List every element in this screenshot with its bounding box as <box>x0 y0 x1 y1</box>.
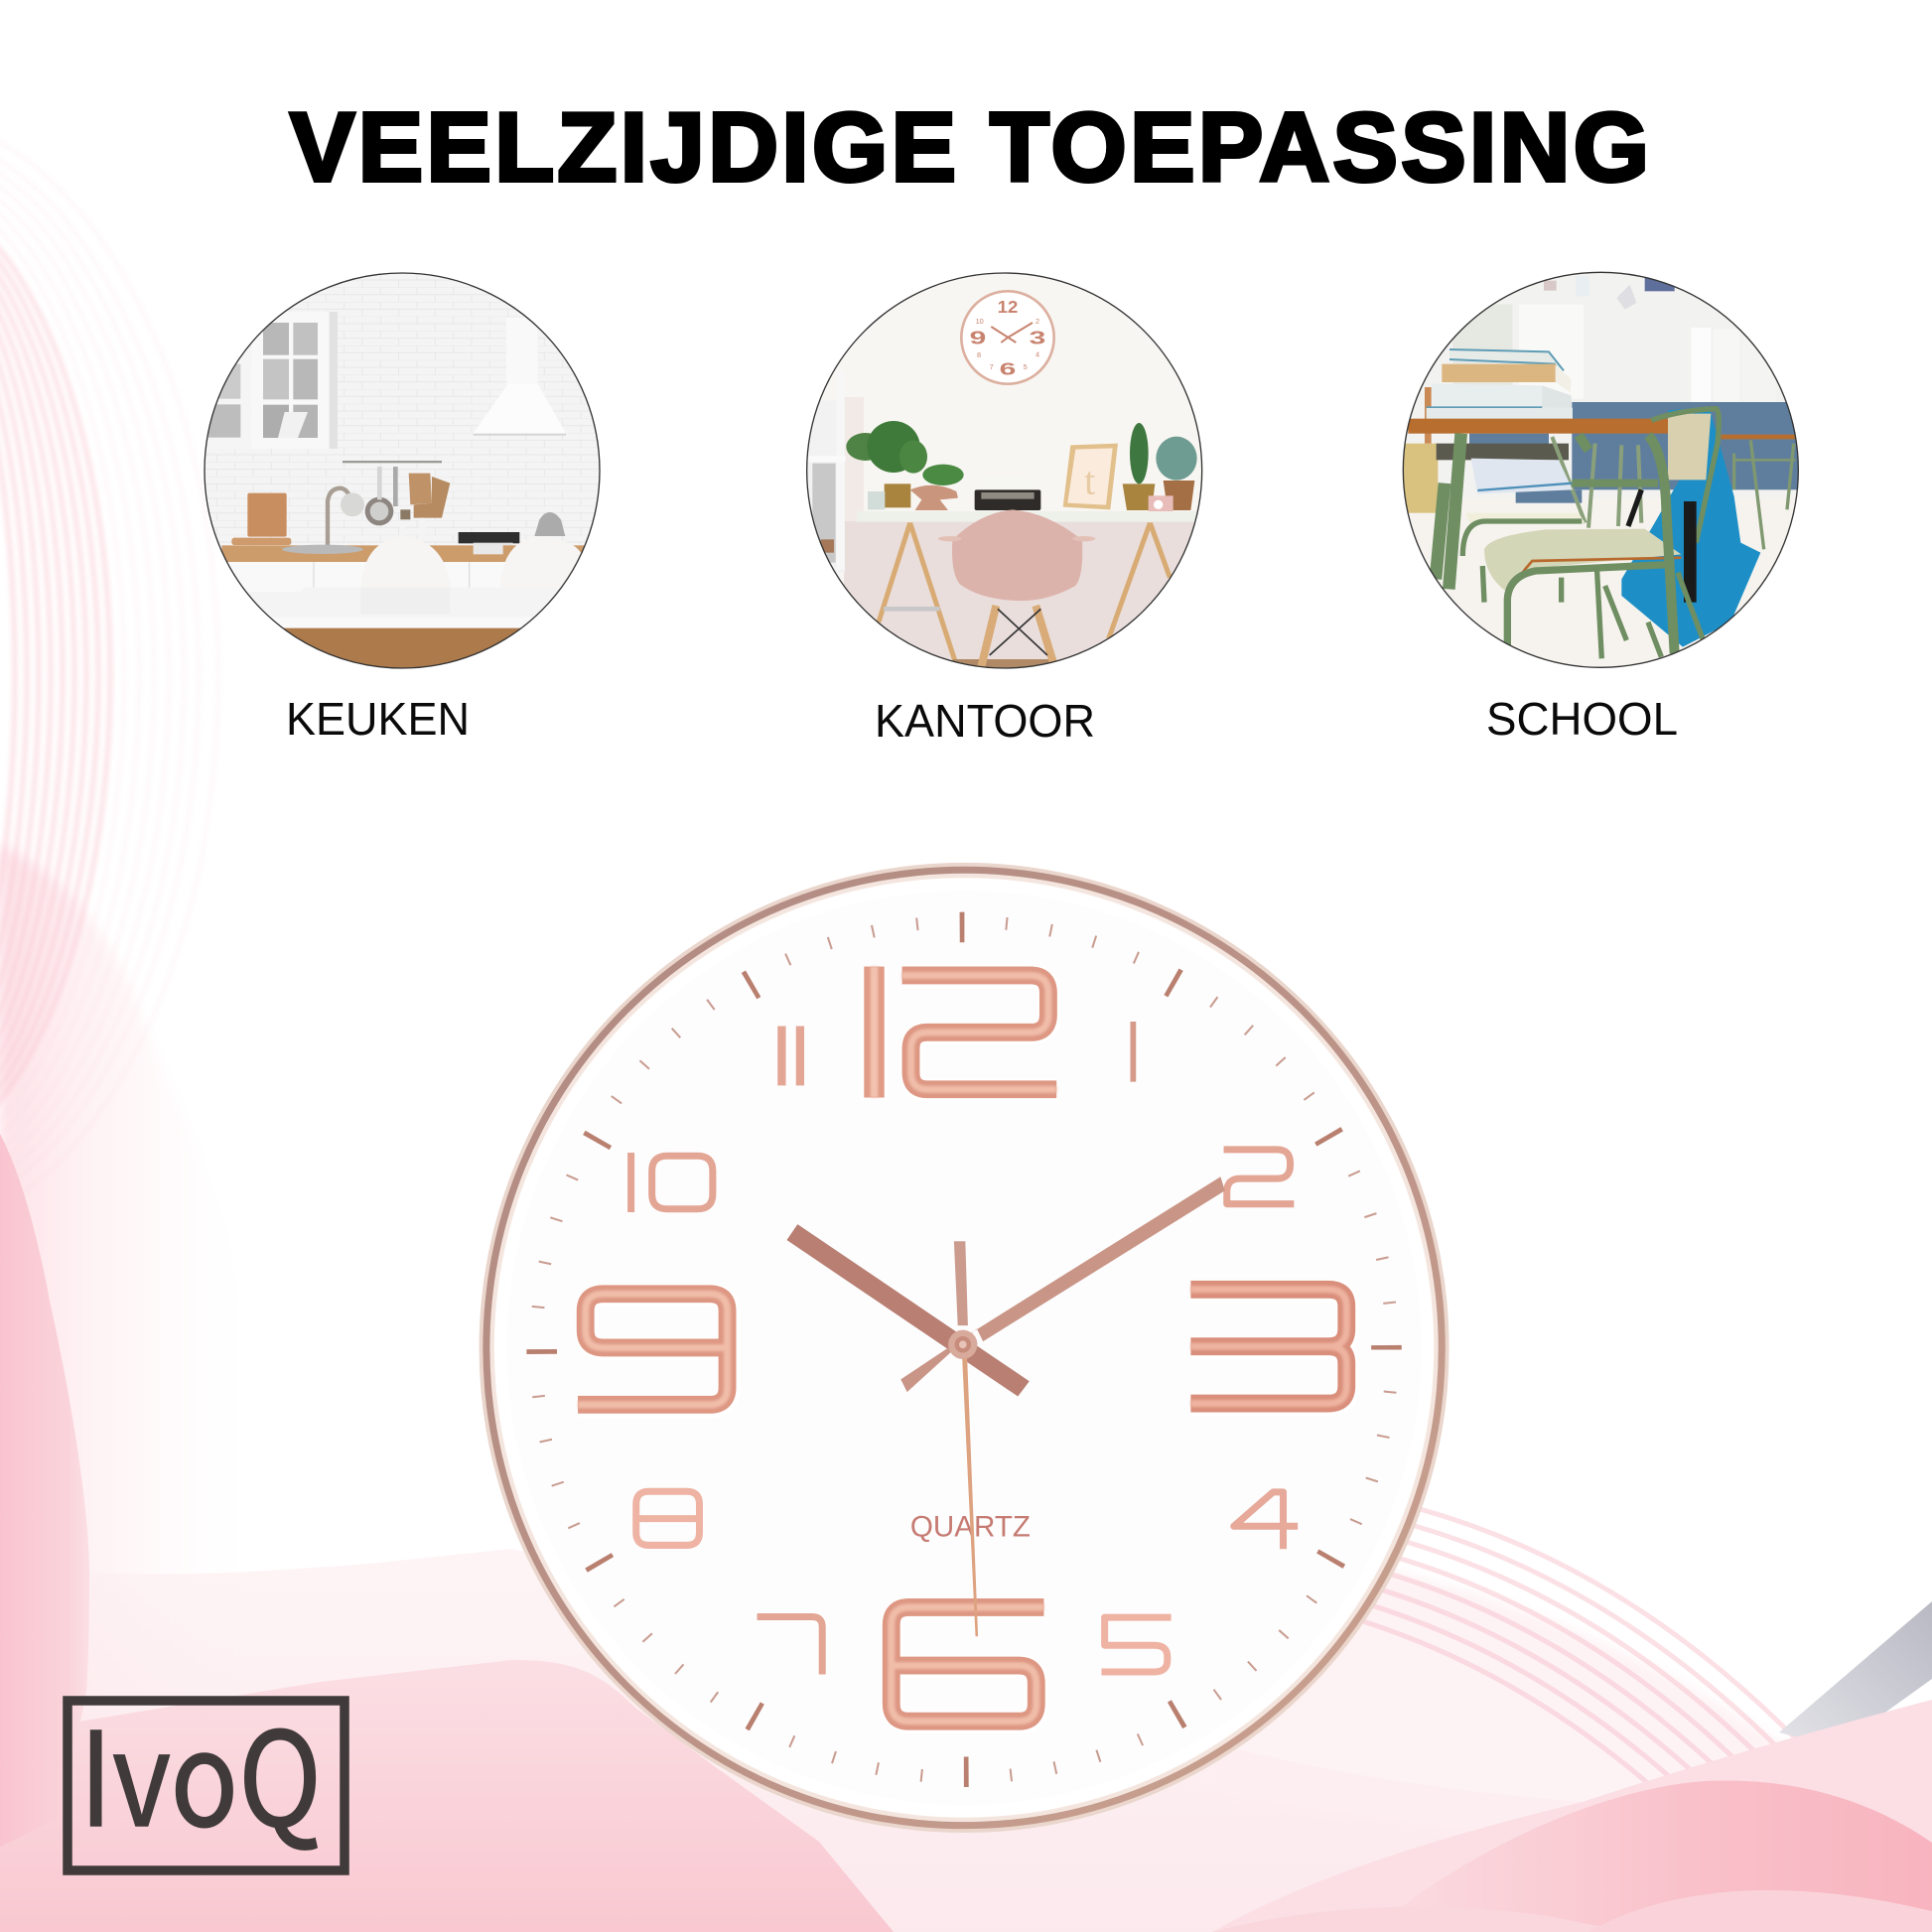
photo: office <box>804 271 1208 672</box>
numeral 5 <box>1101 1617 1172 1672</box>
numeral 8 <box>636 1491 699 1545</box>
photo: office: 3 <box>1030 328 1045 348</box>
photo: office: t <box>1084 458 1095 502</box>
numeral 10 <box>631 1153 713 1212</box>
wall clock <box>480 863 1449 1833</box>
photo: classroom <box>1400 268 1804 672</box>
numerals: large <box>578 967 1348 1723</box>
second hand <box>954 1241 978 1636</box>
tick marks <box>534 919 1394 1780</box>
photo: office: 9 <box>970 328 986 348</box>
photo: office: 4 <box>1035 349 1039 358</box>
photo: office: 5 <box>1024 362 1028 371</box>
photo: office: 6 <box>1000 358 1017 378</box>
logo: IvoQ: IvoQ <box>79 1675 322 1863</box>
minute hand <box>900 1176 1225 1392</box>
panel: kantoor <box>804 271 1208 747</box>
panel: keuken <box>202 271 603 745</box>
photo: office: 2 <box>1035 317 1039 326</box>
photo: office: 7 <box>990 362 994 371</box>
photo: kitchen <box>202 271 603 672</box>
label: kantoor: KANTOOR <box>875 695 1095 747</box>
clock frame <box>480 863 1449 1833</box>
numeral 3 <box>1190 1290 1348 1405</box>
numeral 11 <box>781 1026 800 1085</box>
numeral 1 <box>1129 1022 1138 1082</box>
numeral 4 <box>1234 1492 1298 1549</box>
hour hand <box>787 1224 1030 1397</box>
panel: school <box>1400 268 1804 745</box>
numeral 7 <box>758 1617 822 1675</box>
numeral 6 <box>892 1607 1045 1723</box>
numeral 12 <box>862 967 1057 1099</box>
label: school: SCHOOL <box>1486 693 1678 745</box>
brand text: quartz: QUARTZ <box>910 1511 1031 1544</box>
numeral 2 <box>1224 1150 1294 1204</box>
photo: office: 12 <box>998 297 1018 317</box>
numerals: small <box>631 1022 1298 1675</box>
photo: office: 10 <box>976 317 984 326</box>
title: VEELZIJDIGE TOEPASSING <box>290 92 1649 202</box>
label: keuken: KEUKEN <box>286 693 470 745</box>
numeral 9 <box>578 1294 729 1406</box>
photo: office: 8 <box>977 350 981 359</box>
clock hub <box>948 1330 977 1359</box>
